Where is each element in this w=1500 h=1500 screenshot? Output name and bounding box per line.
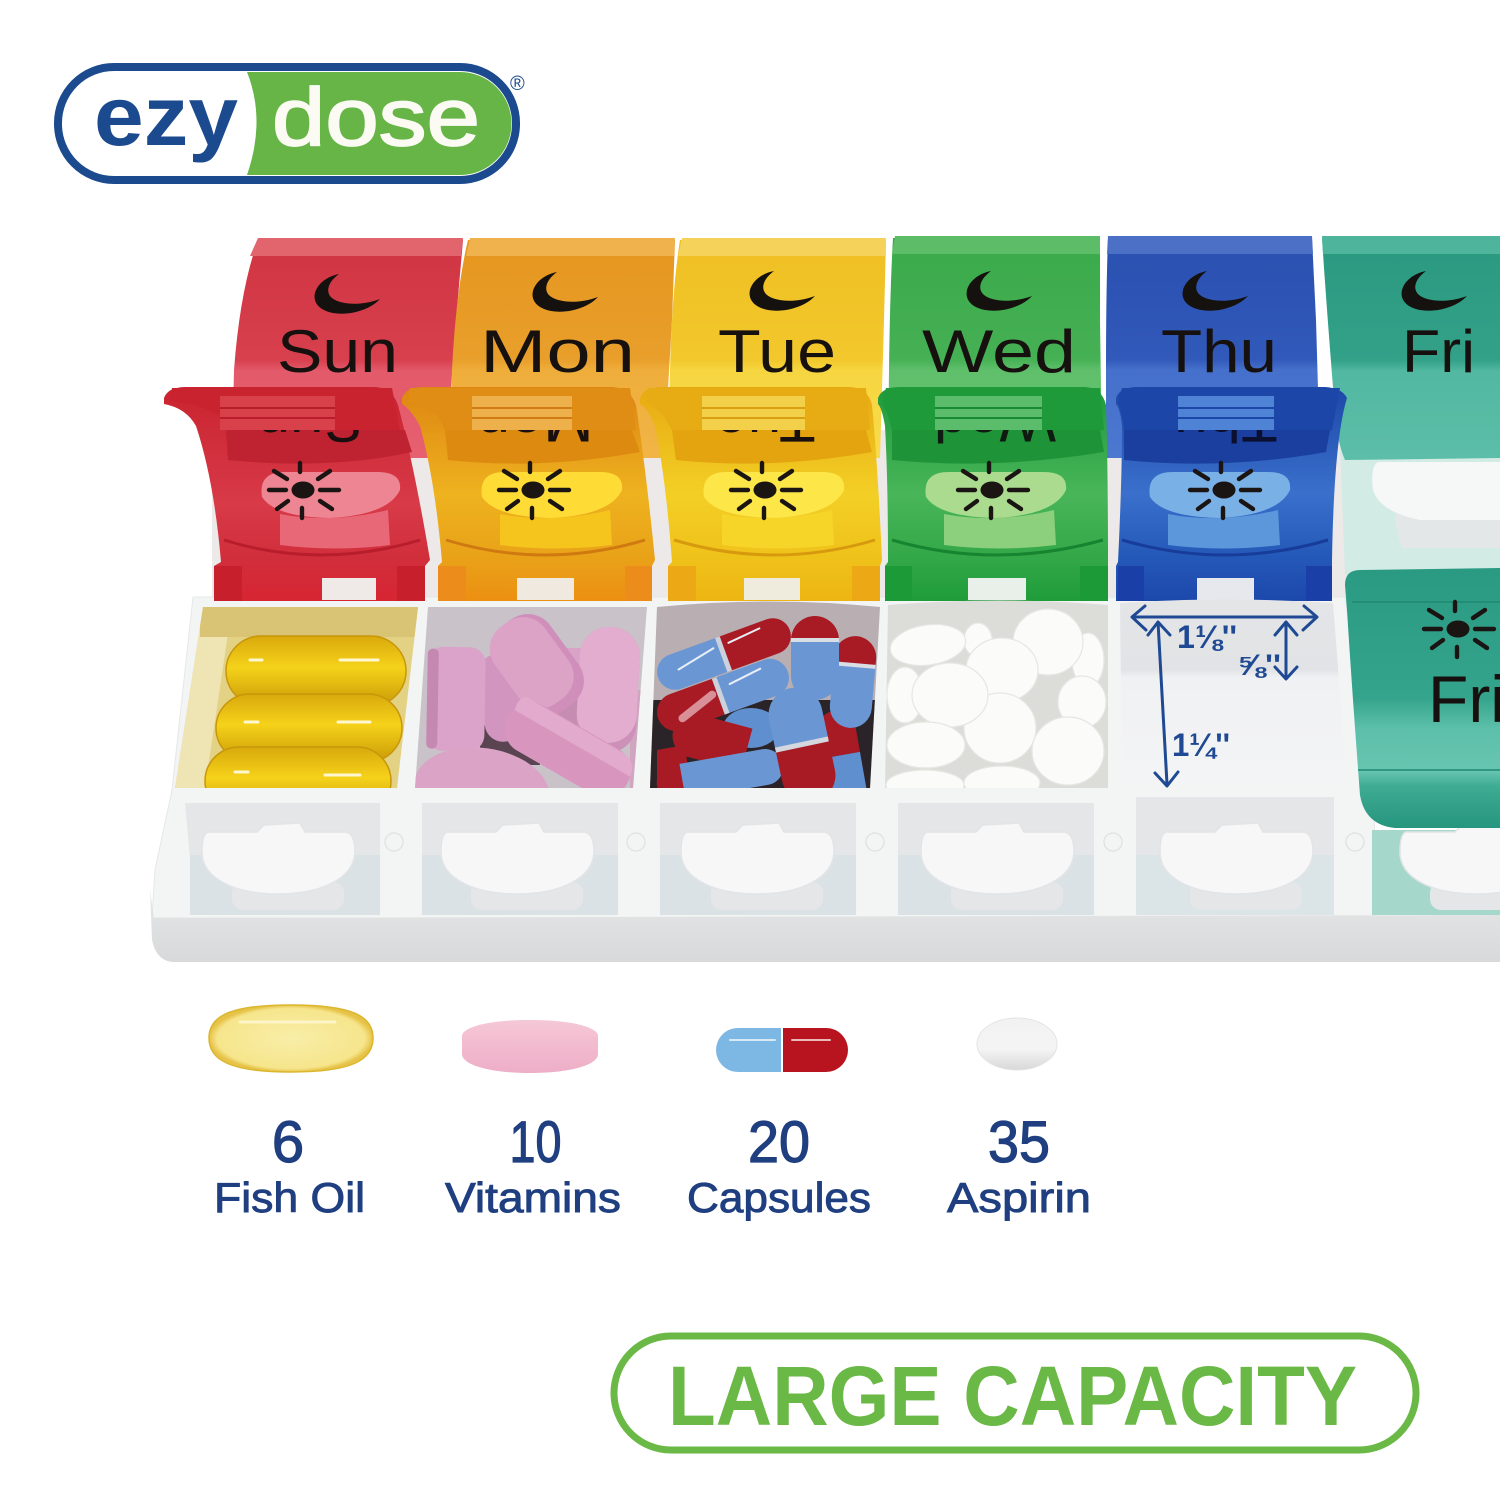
back lid: Wednesday night <box>888 236 1102 458</box>
capacity: fish oil: 6 <box>272 1110 304 1175</box>
badge: large capacity: LARGE CAPACITY <box>668 1349 1357 1443</box>
back lid: Monday night: Mon <box>480 318 635 385</box>
dimension arrows <box>1132 606 1317 786</box>
pill organizer product photo <box>150 236 1500 962</box>
back lid: Monday night <box>450 238 675 458</box>
compartment 3: capsules <box>650 602 880 788</box>
back lid: Thursday night <box>1106 236 1320 458</box>
open lid: Monday morning: Mon <box>477 387 593 454</box>
capacity: capsules: 20 <box>748 1110 810 1175</box>
open lid: Monday morning <box>402 387 655 601</box>
icon: fish oil softgel <box>209 1005 373 1072</box>
logo: ezy dose: ezy <box>94 69 238 163</box>
open lid: Sunday morning <box>164 387 430 601</box>
closed lid: Friday morning <box>1345 568 1500 828</box>
compartment 2: vitamin tablets <box>415 607 647 788</box>
dimension: depth: ⅝'' <box>1237 649 1281 682</box>
capacity: aspirin: Aspirin <box>947 1174 1091 1221</box>
capacity: vitamins: 10 <box>510 1110 562 1175</box>
capacity: fish oil <box>214 1110 365 1221</box>
open lid: Thursday morning: Thu <box>1174 387 1278 454</box>
icon: capsule <box>716 1028 848 1072</box>
capacity: fish oil: Fish Oil <box>214 1174 365 1221</box>
capacity: aspirin: 35 <box>988 1110 1050 1175</box>
open lid: Tuesday morning <box>640 387 882 601</box>
logo: ezy dose <box>58 67 525 180</box>
capacity: vitamins <box>445 1110 621 1221</box>
logo: ezy dose: ® <box>510 73 525 95</box>
back lid: Tuesday night: Tue <box>718 318 836 385</box>
back lid: Sunday night <box>232 238 463 458</box>
tray rear body behind open lids <box>212 430 1500 620</box>
open lid: Wednesday morning <box>878 387 1108 601</box>
open lid: Tuesday morning: Tue <box>714 387 816 454</box>
back lid: Friday night <box>1322 236 1500 460</box>
white tray frame <box>152 597 1376 918</box>
back lid: Friday night: Fri <box>1402 318 1475 385</box>
capacity: aspirin <box>947 1110 1091 1221</box>
icon: aspirin <box>977 1018 1057 1070</box>
back lid: Thursday night: Thu <box>1161 318 1277 385</box>
compartment 4: aspirin tablets <box>885 600 1108 788</box>
icon: vitamin tablet <box>462 1020 598 1073</box>
dimension: width: 1⅛'' <box>1177 619 1237 655</box>
capacity: capsules <box>687 1110 871 1221</box>
capacity: vitamins: Vitamins <box>445 1174 621 1221</box>
compartment 1: fish oil softgels <box>175 607 418 788</box>
back lid: Tuesday night <box>668 238 886 458</box>
back lid: Sunday night: Sun <box>277 318 398 385</box>
upper Friday compartment with tint <box>1340 445 1500 575</box>
compartment 5: empty with dimensions <box>1120 600 1347 785</box>
open lid: Thursday morning <box>1116 387 1347 601</box>
back lid: Wednesday night: Wed <box>922 318 1076 385</box>
lower slots with white push tabs <box>185 797 1500 915</box>
logo: ezy dose: dose <box>272 72 480 163</box>
open lid: Sunday morning: Sun <box>257 387 363 454</box>
dimension: length: 1¼'' <box>1172 727 1230 763</box>
tray base rim <box>150 890 1500 962</box>
capacity: capsules: Capsules <box>687 1174 871 1221</box>
open lid: Wednesday morning: Wed <box>934 387 1056 454</box>
